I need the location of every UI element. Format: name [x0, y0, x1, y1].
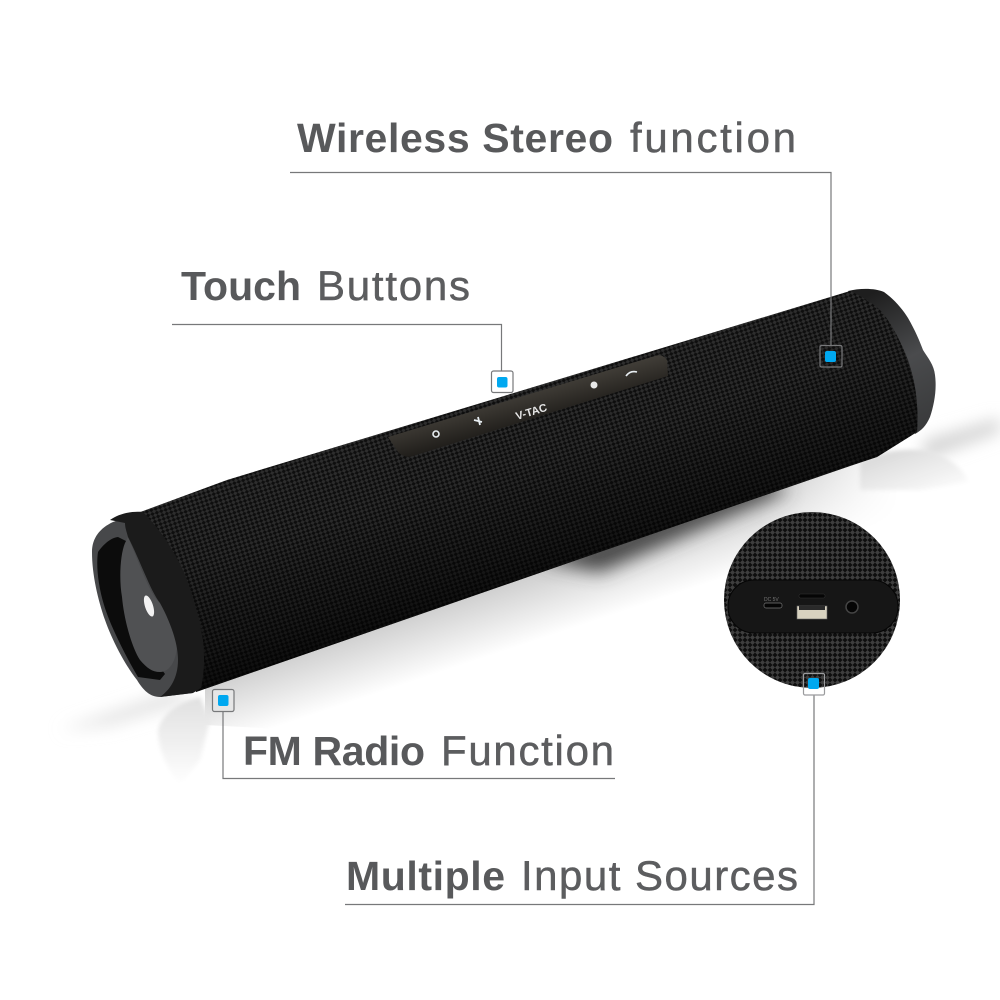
callout: wireless stereo function	[290, 114, 842, 367]
touch panel	[388, 355, 668, 457]
callout: multiple input sources	[345, 674, 824, 904]
inset: input ports	[724, 512, 900, 688]
mesh body	[135, 291, 918, 692]
marker	[804, 674, 824, 695]
mode icon	[590, 382, 598, 388]
heading: Wireless Stereo	[297, 115, 613, 161]
heading: Buttons	[317, 262, 470, 309]
marker	[820, 346, 842, 367]
heading	[243, 727, 614, 774]
memory card slot	[799, 594, 825, 598]
right end cap	[848, 289, 936, 434]
usb port	[797, 606, 827, 619]
speaker	[92, 289, 936, 697]
aux jack	[846, 601, 858, 613]
left end band	[110, 512, 204, 697]
heading: function	[630, 114, 796, 161]
left end rim	[92, 512, 193, 697]
heading	[346, 852, 798, 899]
left end cavity	[97, 537, 165, 680]
heading	[181, 262, 470, 309]
left end disc	[120, 537, 177, 672]
heading: Function	[441, 727, 614, 774]
marker	[212, 690, 234, 712]
micro usb port	[764, 603, 782, 608]
heading: FM Radio	[243, 728, 425, 774]
left end badge	[142, 594, 156, 618]
callout: touch buttons	[172, 262, 513, 392]
callout: fm radio function	[212, 690, 615, 778]
marker	[492, 371, 513, 392]
port labels: DC 5V	[764, 597, 779, 603]
floor shadows and reflections	[60, 418, 1000, 785]
power icon	[433, 431, 439, 437]
phone icon	[626, 372, 637, 376]
heading: Multiple	[346, 853, 505, 899]
body shading	[135, 291, 918, 692]
heading	[297, 114, 796, 161]
heading: Input Sources	[521, 852, 798, 899]
brand logo: V-TAC	[514, 402, 549, 423]
heading: Touch	[181, 263, 301, 309]
bluetooth icon	[474, 417, 482, 425]
